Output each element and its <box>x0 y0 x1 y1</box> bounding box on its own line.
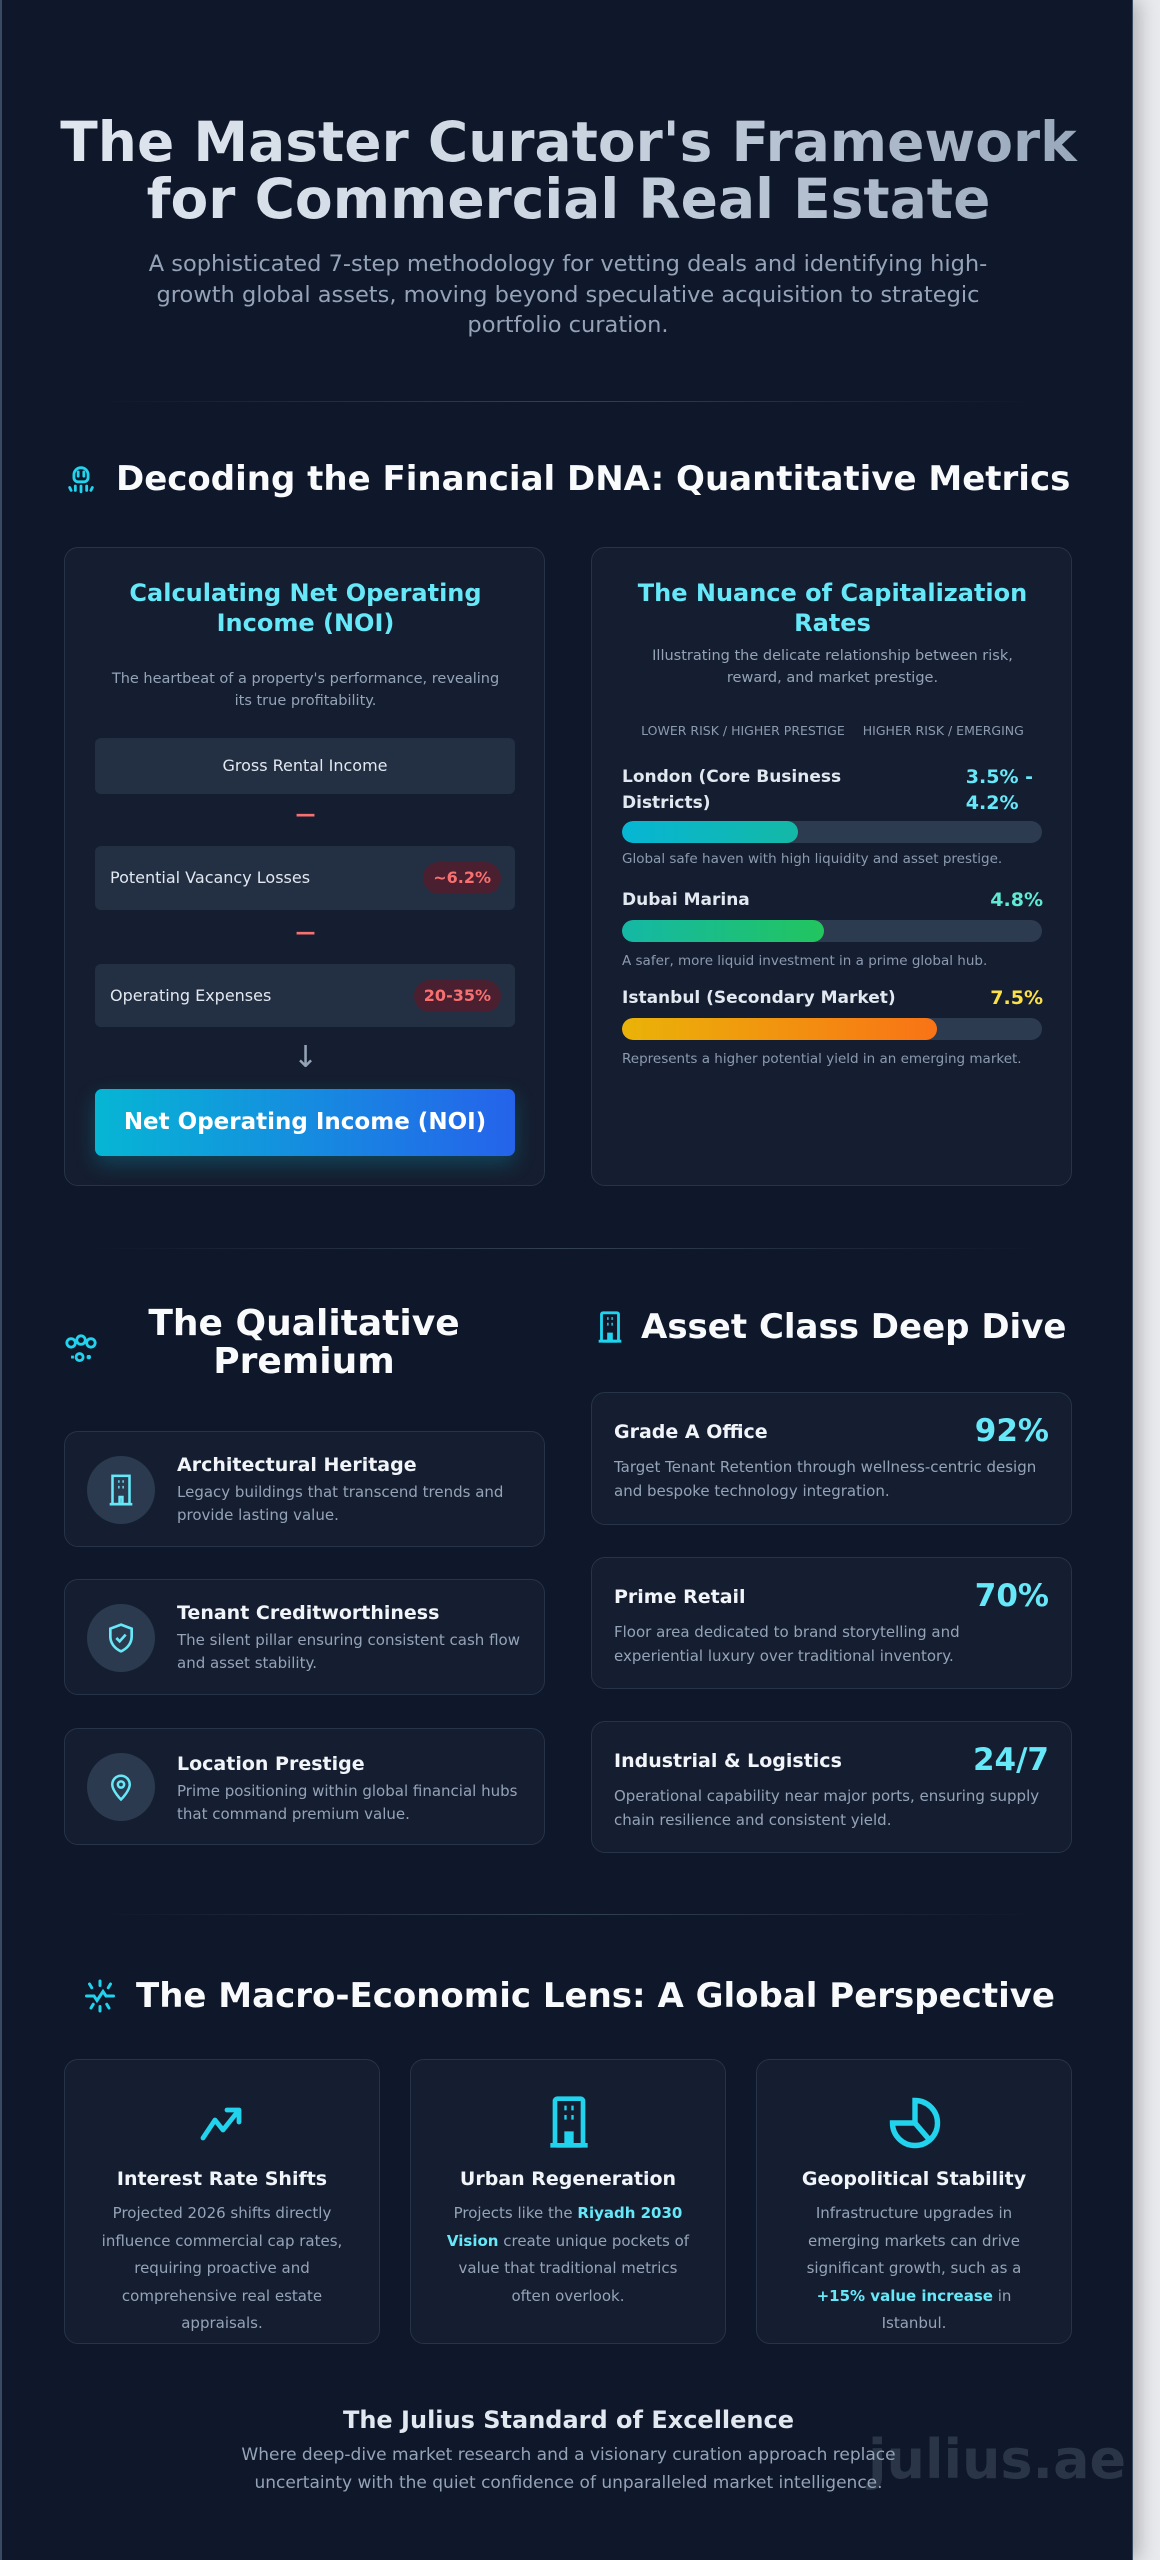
bar: Istanbul: Represents a higher potential yield in an emerging market. <box>622 1051 1022 1067</box>
scale labels <box>641 723 1024 738</box>
icon: building <box>598 1311 622 1343</box>
card: architectural heritage: Architectural Heritage <box>177 1454 417 1476</box>
card: tenant creditworthiness: The silent pillar ensuring consistent cash flow and asset stability. <box>177 1631 520 1672</box>
bar: London <box>622 766 1042 867</box>
icon: shield <box>87 1604 155 1672</box>
card: architectural heritage: Legacy buildings that transcend trends and provide lasting value. <box>177 1483 503 1524</box>
card: industrial <box>591 1721 1072 1853</box>
bar: London: Districts) <box>622 793 710 813</box>
card: tenant creditworthiness <box>64 1579 545 1695</box>
card: location prestige: Prime positioning within global financial hubs that command premium value. <box>177 1782 517 1823</box>
scale labels: HIGHER RISK / EMERGING <box>863 723 1024 738</box>
card: tenant creditworthiness: Tenant Creditworthiness <box>177 1602 439 1624</box>
icon: dna brain <box>68 466 94 494</box>
row: vacancy losses <box>95 846 515 910</box>
card: interest rate shifts <box>64 2059 380 2344</box>
card: industrial: Industrial & Logistics <box>614 1750 842 1772</box>
subtitle: A sophisticated 7-step methodology for vetting deals and identifying high-growth global assets, moving beyond speculative acquisition to strategic portfolio curation. <box>149 251 987 338</box>
icon: people <box>65 1334 97 1362</box>
card: grade A office: Target Tenant Retention through wellness-centric design and bespoke technology integration. <box>614 1458 1036 1500</box>
row: gross rental income <box>95 738 515 794</box>
heading: qualitative premium: The Qualitative Premium <box>148 1303 460 1382</box>
row: vacancy losses: ~6.2% <box>433 868 491 887</box>
card: location prestige <box>64 1728 545 1845</box>
bar: Dubai: Dubai Marina <box>622 890 750 910</box>
card: grade A office <box>591 1392 1072 1525</box>
bar: Istanbul: 7.5% <box>990 987 1043 1009</box>
icon: trend up <box>200 2108 242 2140</box>
footer title: The Julius Standard of Excellence <box>343 2406 794 2434</box>
cap title: The Nuance of Capitalization Rates <box>638 579 1027 637</box>
panel: NOI: — <box>296 920 316 944</box>
card: interest rate shifts: Projected 2026 shifts directly influence commercial cap rates, requiring proactive and comprehensive real estate appraisals. <box>102 2204 342 2332</box>
icon: building <box>550 2096 588 2148</box>
bar: Istanbul: Istanbul (Secondary Market) <box>622 988 896 1008</box>
bar: Istanbul <box>622 987 1043 1067</box>
card: industrial: Operational capability near major ports, ensuring supply chain resilience and consistent yield. <box>614 1787 1039 1829</box>
card: architectural heritage <box>64 1431 545 1547</box>
bar: Dubai <box>622 889 1043 969</box>
icon <box>87 1456 155 1524</box>
card: geopolitical stability: Infrastructure upgrades in emerging markets can drive significant growth, such as a +15% value increase in Istanbul. <box>807 2204 1021 2332</box>
card: grade A office: Grade A Office <box>614 1421 768 1443</box>
row: operating expenses <box>95 964 515 1027</box>
bar: London: 3.5% - <box>966 766 1033 788</box>
bar: London: Global safe haven with high liquidity and asset prestige. <box>622 851 1002 867</box>
icon: sparkle <box>85 1980 115 2012</box>
card: location prestige: Location Prestige <box>177 1753 365 1775</box>
card: geopolitical stability: Geopolitical Stability <box>802 2168 1026 2190</box>
NOI result: Net Operating Income (NOI) <box>124 1109 486 1135</box>
card: prime retail: 70% <box>975 1578 1049 1614</box>
card: urban regeneration: Urban Regeneration <box>460 2168 676 2190</box>
bar: Dubai: 4.8% <box>990 889 1043 911</box>
NOI title: Calculating Net Operating Income (NOI) <box>129 579 482 637</box>
arrow: down: ↓ <box>293 1040 318 1075</box>
panel: NOI <box>64 547 545 1186</box>
card: prime retail: Prime Retail <box>614 1586 746 1608</box>
card: grade A office: 92% <box>975 1413 1049 1449</box>
card: interest rate shifts: Interest Rate Shifts <box>117 2168 327 2190</box>
row: vacancy losses: Potential Vacancy Losses <box>110 868 310 887</box>
icon: pin <box>87 1753 155 1821</box>
card: prime retail: Floor area dedicated to brand storytelling and experiential luxury over traditional inventory. <box>614 1623 960 1665</box>
card: geopolitical stability <box>756 2059 1072 2344</box>
title: for Commercial Real Estate <box>147 167 990 231</box>
card: industrial: 24/7 <box>973 1742 1049 1778</box>
title <box>2 114 1135 228</box>
card: prime retail <box>591 1557 1072 1689</box>
row: operating expenses: 20-35% <box>424 986 491 1004</box>
panel: cap rates <box>591 547 1072 1186</box>
NOI description: The heartbeat of a property's performance, revealing its true profitability. <box>112 671 499 709</box>
bar: London: London (Core Business <box>622 767 841 787</box>
row: gross rental income: Gross Rental Income <box>222 756 388 775</box>
cap description: Illustrating the delicate relationship between risk, reward, and market prestige. <box>652 648 1013 686</box>
card: urban regeneration <box>410 2059 726 2344</box>
scale labels: LOWER RISK / HIGHER PRESTIGE <box>641 723 845 738</box>
heading: macro lens: The Macro-Economic Lens: A Global Perspective <box>136 1976 1055 2016</box>
bar: Dubai: A safer, more liquid investment in a prime global hub. <box>622 953 987 969</box>
card: urban regeneration: Projects like the Riyadh 2030 Vision create unique pockets of value that traditional metrics often overlook. <box>447 2204 689 2304</box>
row: operating expenses: Operating Expenses <box>110 986 271 1005</box>
icon: pie/globe <box>890 2098 940 2148</box>
footer text: Where deep-dive market research and a visionary curation approach replace uncertainty with the quiet confidence of unparalleled market intelligence. <box>241 2445 896 2493</box>
panel: NOI: — <box>296 802 316 826</box>
bar: London: 4.2% <box>966 792 1018 814</box>
title: The Master Curator's Framework <box>60 110 1077 174</box>
NOI result <box>95 1089 515 1156</box>
heading: asset class: Asset Class Deep Dive <box>641 1307 1066 1347</box>
watermark: julius.ae <box>868 2428 1126 2491</box>
heading: financial DNA: Decoding the Financial DNA: Quantitative Metrics <box>116 459 1070 499</box>
